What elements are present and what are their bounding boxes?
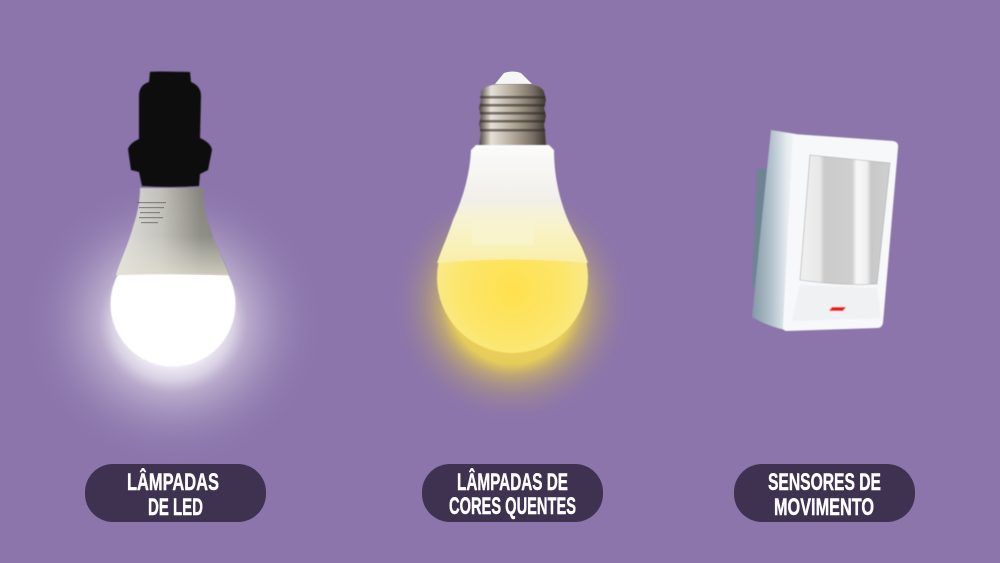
black socket bbox=[128, 72, 212, 187]
printed label bbox=[137, 202, 166, 223]
bulb body bbox=[437, 145, 588, 263]
red LED bbox=[829, 307, 846, 311]
metal screw base bbox=[479, 84, 546, 146]
label: lâmpadas de LED: DE LED bbox=[148, 494, 203, 521]
white glow bbox=[25, 180, 321, 464]
warm glow bbox=[390, 181, 634, 425]
icon: motion sensor bbox=[752, 130, 898, 331]
rear mount bbox=[752, 169, 770, 287]
label: lâmpadas de cores quentes bbox=[422, 464, 603, 522]
lower body light bbox=[116, 188, 229, 275]
lit globe bbox=[110, 242, 236, 366]
tip bbox=[495, 72, 532, 84]
lens bbox=[800, 155, 890, 284]
label: sensores de movimento: SENSORES DE bbox=[768, 469, 881, 496]
inner panel bbox=[472, 218, 534, 245]
label: sensores de movimento: MOVIMENTO bbox=[774, 494, 874, 521]
bulb body bbox=[116, 188, 229, 275]
icon: warm yellow bulb bbox=[390, 72, 634, 425]
label: lâmpadas de cores quentes: LÂMPADAS DE bbox=[457, 468, 568, 496]
label: sensores de movimento bbox=[734, 464, 915, 522]
label: lâmpadas de LED bbox=[85, 464, 266, 522]
front face bbox=[783, 134, 898, 331]
yellow globe bbox=[437, 202, 588, 353]
icon: white LED bulb bbox=[25, 72, 321, 464]
side wall bbox=[752, 130, 796, 330]
screw threads bbox=[480, 96, 545, 132]
label: lâmpadas de cores quentes: CORES QUENTES bbox=[449, 493, 576, 520]
label: lâmpadas de LED: LÂMPADAS bbox=[127, 468, 219, 496]
lower bevel bbox=[792, 285, 881, 321]
